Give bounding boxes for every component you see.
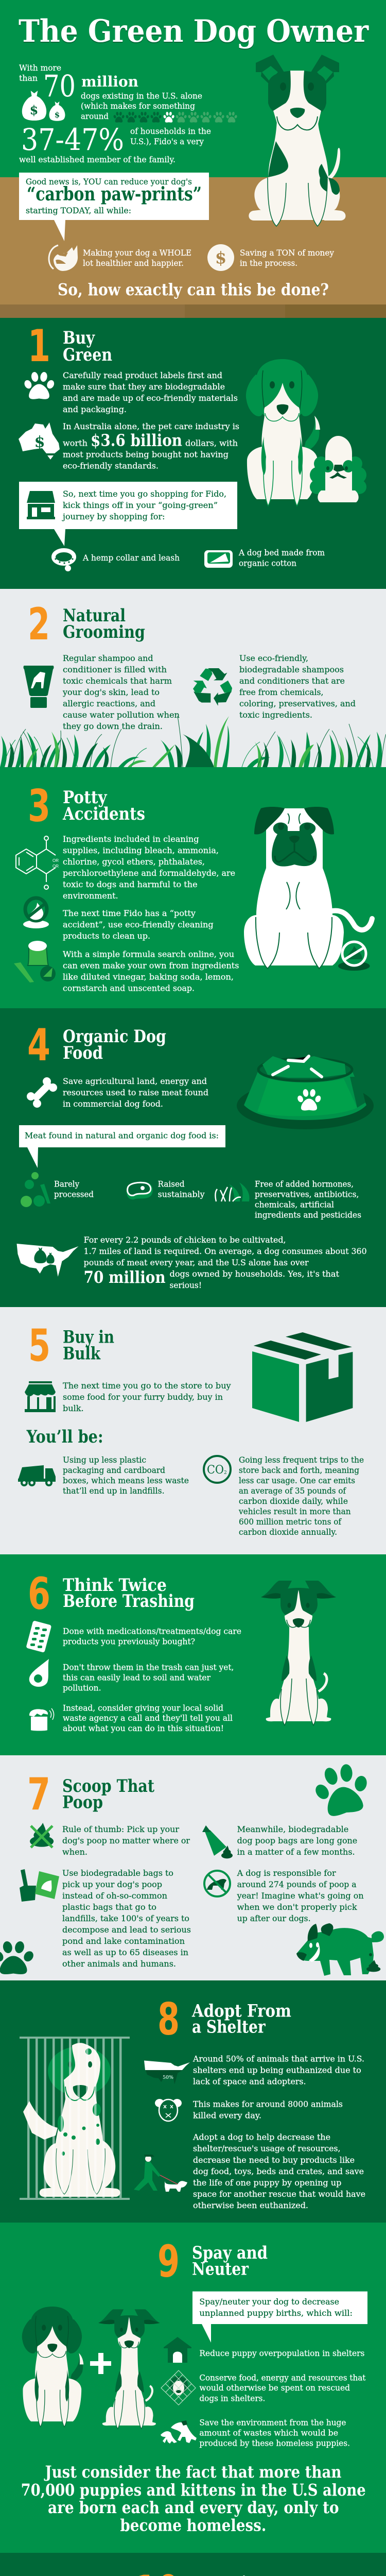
- text: free of added hormones: ingredients and pesticides: [255, 1210, 361, 1220]
- panel: 1 buy green: [0, 318, 386, 589]
- text: save the environment: Save the environment from the huge: [199, 2417, 346, 2428]
- callout: spay and neuter: unplanned puppy births, which will:: [199, 2308, 353, 2318]
- icon: collar: [54, 550, 74, 571]
- icon: row of paw prints: [113, 112, 238, 123]
- text: call waste agency: about what you can do in this situation!: [63, 1723, 224, 1733]
- text: use biodegradable bags: plastic bags that go to: [62, 1902, 156, 1912]
- text: fewer trips: carbon dioxide annually.: [239, 1527, 337, 1537]
- text: adopt a dog: space for another rescue that would have: [193, 2189, 365, 2199]
- text: labels: [63, 370, 238, 414]
- panel: 4 organic dog food: [0, 1008, 386, 1307]
- icon: CO2: CO: [207, 1464, 224, 1477]
- illustration: small spaniel: [310, 436, 366, 502]
- intro statistics text: (which makes for something: [81, 101, 195, 111]
- intro statistics text: around: [81, 111, 109, 121]
- text: don't throw: [63, 1663, 234, 1693]
- icon: two puppies: [161, 2420, 197, 2444]
- icon: dead dog face: [155, 2099, 182, 2121]
- text: chicken statistic: serious!: [170, 1280, 202, 1290]
- icon: homemade ingredients: [14, 941, 56, 982]
- heading: Food: [63, 1043, 103, 1063]
- text: formula: With a simple formula search online, you: [63, 949, 234, 959]
- text: don't throw: this can easily lead to soil and water: [63, 1673, 210, 1683]
- callout: spay and neuter: [192, 2292, 367, 2343]
- text: free of added hormones: chemicals, artificial: [255, 1199, 334, 1209]
- text: buy in bulk: The next time you go to the store to buy: [63, 1381, 231, 1391]
- text: regular shampoo: allergic reactions, and: [63, 699, 155, 708]
- text: free of added hormones: preservatives, antibiotics,: [255, 1189, 359, 1199]
- text: adopt a dog: the life of one puppy by opening up: [193, 2178, 341, 2188]
- text: fewer trips: carbon dioxide daily, while: [239, 1496, 348, 1506]
- heading: Poop: [62, 1792, 103, 1812]
- text: free of added hormones: [255, 1179, 361, 1220]
- text: agricultural land: in commercial dog food.: [63, 1099, 163, 1109]
- icon: dollar coin: $: [215, 248, 226, 267]
- panel: 8 adopt from a shelter: [0, 1980, 386, 2223]
- icon: chemical formula: OR: [52, 864, 59, 869]
- text: chicken statistic: For every 2.2 pounds of chicken to be cultivated,: [84, 1235, 286, 1245]
- heading: Before Trashing: [63, 1591, 195, 1612]
- icon: dollar coin: [207, 244, 234, 271]
- panel: 9 spay and neuter: [0, 2223, 386, 2553]
- text: conserve food: [199, 2373, 366, 2403]
- text: labels: make sure that they are biodegradable: [63, 382, 225, 392]
- heading: how can this be done: So, how exactly can this be done?: [58, 280, 329, 299]
- text: labels: and are made up of eco-friendly materials: [63, 393, 238, 403]
- text: formula: [63, 949, 239, 993]
- text: free of added hormones: Free of added hormones,: [255, 1179, 354, 1189]
- illustration: beagle: [246, 359, 320, 506]
- panel: 10 donations: [0, 2553, 386, 2576]
- heading: Buy: [63, 328, 95, 348]
- text: barely processed: [54, 1179, 94, 1199]
- icon: no poop: [338, 942, 370, 971]
- text: biodegradable bags gone: [237, 1824, 357, 1857]
- text: barely processed: Barely: [54, 1179, 79, 1189]
- heading: Neuter: [192, 2259, 249, 2280]
- text: use biodegradable bags: [62, 1868, 191, 1969]
- number 3: 3: [28, 781, 50, 832]
- heading: [62, 787, 145, 824]
- heading: [63, 605, 145, 642]
- intro statistics text: of households in the: [130, 126, 211, 136]
- benefit: healthier dog: [83, 248, 191, 268]
- text: ingredients: chlorine, gycol ethers, phthalates,: [63, 857, 205, 867]
- icon: USA map with money: [16, 1244, 78, 1277]
- heading: Adopt From: [191, 2001, 291, 2022]
- heading: [63, 1575, 195, 1612]
- text: labels: Carefully read product labels first and: [63, 370, 222, 380]
- text: 8000 animals: This makes for around 8000 animals: [193, 2099, 343, 2109]
- text: save the environment: produced by these homeless puppies.: [199, 2438, 350, 2448]
- number 6: 6: [28, 1568, 50, 1620]
- heading: [191, 2001, 291, 2038]
- benefit: saving money: in the process.: [240, 258, 297, 268]
- icon: grass: [215, 1182, 250, 1201]
- text: buy in bulk: bulk.: [63, 1403, 84, 1413]
- text: adopt a dog: shelter/rescue's usage of resources,: [193, 2144, 341, 2154]
- icon: chemical formula: OR: [52, 858, 59, 863]
- icon: steak: [127, 1182, 153, 1199]
- text: don't throw: pollution.: [63, 1683, 101, 1693]
- text: use biodegradable bags: landfills, take 100's of years to: [62, 1913, 189, 1923]
- text: agricultural land: Save agricultural land, energy and: [63, 1076, 207, 1086]
- text: regular shampoo: Regular shampoo and: [63, 653, 153, 663]
- icon: happy curled dog: [49, 245, 78, 271]
- text: 50% euthanized: shelters end up being euthanized due to: [193, 2065, 361, 2075]
- text: less plastic: that’ll end up in landfills.: [63, 1486, 165, 1496]
- text: less plastic: boxes, which means less waste: [63, 1476, 189, 1485]
- number 2: 2: [28, 599, 50, 650]
- text: australia statistic: eco-friendly standards.: [63, 461, 159, 471]
- number 8: 8: [157, 1994, 180, 2045]
- icon: dog behind fence: [161, 2370, 196, 2405]
- benefit: healthier dog: Making your dog a WHOLE: [83, 248, 191, 258]
- text: australia statistic: [63, 421, 239, 471]
- text: call waste agency: [63, 1703, 233, 1733]
- icon: money bags: [22, 91, 65, 121]
- text: agricultural land: resources used to raise meat found: [63, 1088, 208, 1097]
- text: hemp collar: A hemp collar and leash: [82, 553, 180, 563]
- text: less plastic: [63, 1455, 189, 1496]
- text: adopt a dog: Adopt a dog to help decrease the: [192, 2132, 330, 2142]
- icon: dark paw: [0, 1941, 35, 1974]
- text: next time: [63, 908, 214, 941]
- text: 50% euthanized: Around 50% of animals that arrive in U.S.: [192, 2054, 364, 2064]
- text: chicken statistic: 1.7 miles of land is required. On average, a dog consumes about 360: [84, 1246, 367, 1256]
- text: conserve food: Conserve food, energy and resources that: [199, 2373, 366, 2382]
- icon: telephone: [29, 1708, 54, 1731]
- illustration: greyhound: [261, 1581, 336, 1725]
- text: buy in bulk: some food for your furry buddy, buy in: [63, 1392, 223, 1402]
- text: eco shampoo: free from chemicals,: [239, 687, 323, 697]
- icon: dog house: [164, 2337, 191, 2363]
- text: chicken statistic: pounds of meat every year, and the U.S alone has over: [84, 1258, 309, 1267]
- illustration: grass: [0, 716, 386, 767]
- big fact: become homeless.: [120, 2516, 266, 2535]
- text: formula: like diluted vinegar, baking soda, lemon,: [63, 972, 234, 982]
- text: less plastic: Using up less plastic: [63, 1455, 146, 1465]
- heading: you'll be: You’ll be:: [26, 1427, 103, 1447]
- number 9: 9: [157, 2236, 180, 2287]
- number 4: 4: [27, 1020, 50, 1071]
- text: regular shampoo: [62, 653, 180, 731]
- text: use biodegradable bags: instead of oh-so-common: [62, 1891, 167, 1901]
- heading: Organic Dog: [63, 1026, 166, 1047]
- text: fewer trips: Going less frequent trips to the: [239, 1455, 364, 1465]
- callout: carbon paw-prints: “carbon paw-prints”: [27, 183, 202, 205]
- benefit: healthier dog: lot healthier and happier.: [83, 258, 184, 268]
- text: chicken statistic: [84, 1235, 367, 1290]
- panel: intro: [0, 0, 386, 318]
- heading: Grooming: [63, 622, 145, 642]
- illustration: cage bars: [20, 2037, 130, 2200]
- text: 274 pounds: up after our dogs.: [237, 1913, 311, 1923]
- text: next time: accident”, use eco-friendly cleaning: [63, 920, 214, 929]
- text: conserve food: would otherwise be spent on rescued: [199, 2383, 350, 2393]
- text: formula: cornstarch and unscented soap.: [63, 983, 195, 993]
- text: australia statistic: $3.6 billion: [91, 431, 182, 450]
- text: save the environment: amount of wastes which would be: [199, 2428, 338, 2437]
- illustration: greyhound: [98, 2309, 160, 2429]
- panel: 3 potty accidents: [0, 767, 386, 1008]
- text: rule of thumb: Rule of thumb: Pick up your: [62, 1824, 179, 1834]
- icon: dog bed: [204, 550, 233, 568]
- heading: Scoop That: [62, 1776, 154, 1797]
- icon: recycle: [193, 668, 232, 706]
- text: raised sustainably: sustainably: [158, 1189, 205, 1199]
- intro statistics text: dogs existing in the U.S. alone: [81, 91, 202, 101]
- text: regular shampoo: your dog's skin, lead to: [62, 687, 160, 697]
- text: rule of thumb: when.: [62, 1847, 87, 1857]
- text: formula: can even make your own from ingredients: [63, 960, 239, 971]
- heading: [63, 1327, 114, 1364]
- text: reduce overpopulation: Reduce puppy overpopulation in shelters: [199, 2348, 364, 2358]
- text: dog bed: A dog bed made from: [238, 548, 325, 557]
- illustration: setter dog in cage: [23, 2043, 120, 2197]
- text: fewer trips: less car usage. One car emits: [239, 1476, 355, 1485]
- text: fewer trips: vehicles result in more than: [238, 1506, 351, 1516]
- icon: poop bag: [202, 1825, 233, 1858]
- text: chicken statistic: dogs owned by households. Yes, it's that: [170, 1269, 340, 1279]
- text: biodegradable bags gone: in a matter of a few months.: [237, 1847, 355, 1857]
- icon: big paw: [309, 1759, 375, 1819]
- text: 8000 animals: [193, 2099, 343, 2120]
- text: ingredients: toxic to dogs and harmful to the: [63, 879, 198, 889]
- text: eco shampoo: Use eco-friendly,: [239, 653, 308, 663]
- text: call waste agency: waste agency a call and they'll tell you all: [63, 1713, 233, 1723]
- text: biodegradable bags gone: Meanwhile, biodegradable: [237, 1824, 348, 1834]
- number 5: 5: [28, 1320, 50, 1371]
- icon: garbage truck: [18, 1465, 56, 1486]
- icon: no dog fouling: [204, 1871, 230, 1896]
- icon: money bags: $: [55, 110, 60, 120]
- illustration: dog food bowl: [237, 1056, 374, 1129]
- icon: person walking small dog: [134, 2155, 187, 2192]
- text: adopt a dog: [192, 2132, 365, 2210]
- text: next time: products to clean up.: [63, 931, 150, 941]
- text: done with medications: [63, 1626, 241, 1647]
- callout: meat: [19, 1125, 225, 1168]
- panel: 2 natural grooming: [0, 589, 386, 767]
- text: regular shampoo: cause water pollution when: [63, 710, 180, 720]
- text: 50% euthanized: lack of space and adopters.: [193, 2076, 306, 2087]
- text: australia statistic: In Australia alone, the pet care industry is: [63, 421, 239, 431]
- text: ingredients: [63, 834, 235, 901]
- text: fewer trips: an average of 35 pounds of: [239, 1486, 346, 1496]
- text: agricultural land: [63, 1076, 208, 1109]
- icon: scoop and bag: [20, 1869, 59, 1902]
- intro statistics text: than: [19, 73, 38, 83]
- callout: shopping: journey by shopping for:: [62, 512, 165, 521]
- text: eco shampoo: [239, 653, 356, 720]
- text: regular shampoo: they go down the drain.: [63, 721, 163, 731]
- heading: [63, 328, 112, 365]
- icon: money bags: $: [30, 103, 38, 117]
- text: save the environment: [199, 2417, 350, 2448]
- icon: paw: [23, 371, 55, 399]
- callout: shopping: So, next time you go shopping for Fido,: [63, 489, 226, 499]
- intro statistics text: U.S.), Fido's a very: [130, 137, 204, 146]
- text: 274 pounds: [237, 1868, 364, 1923]
- text: adopt a dog: otherwise been euthanized.: [193, 2200, 308, 2210]
- icon: pet store: [25, 1381, 56, 1412]
- text: ingredients: Ingredients included in cleaning: [63, 834, 199, 844]
- text: australia statistic: worth: [63, 438, 87, 448]
- benefit: saving money: Saving a TON of money: [240, 248, 334, 258]
- text: 274 pounds: year! Imagine what's going on: [237, 1891, 364, 1901]
- intro statistics text: well established member of the family.: [19, 155, 176, 164]
- text: rule of thumb: dog's poop no matter where or: [62, 1836, 190, 1845]
- text: call waste agency: Instead, consider giving your local solid: [63, 1703, 223, 1713]
- text: 50% euthanized: [192, 2054, 364, 2087]
- callout: carbon paw-prints: starting TODAY, all while:: [26, 206, 131, 215]
- text: fewer trips: store back and forth, meaning: [239, 1465, 359, 1475]
- text: eco shampoo: toxic ingredients.: [239, 710, 312, 720]
- icon: USA 50 percent: 50%: [163, 2075, 173, 2080]
- icon: CO2: 2: [224, 1470, 227, 1476]
- icon: no cleaning chemicals: [23, 898, 49, 928]
- text: 274 pounds: around 274 pounds of poop a: [237, 1879, 357, 1889]
- benefit: saving money: [240, 248, 334, 268]
- icon: chemical formula: [16, 836, 59, 889]
- text: australia statistic: dollars, with: [185, 438, 238, 448]
- heading: Think Twice: [63, 1575, 167, 1596]
- text: dog bed: organic cotton: [239, 558, 296, 568]
- intro statistics text: [19, 63, 211, 164]
- big fact: Just consider the fact that more than: [44, 2462, 341, 2482]
- icon: shampoo tube: [24, 666, 54, 708]
- illustration: pug: [244, 807, 372, 969]
- text: australia statistic: most products being bought not having: [63, 449, 229, 460]
- callout: shopping: [19, 482, 237, 546]
- number 1: 1: [28, 320, 50, 372]
- callout: spay and neuter: Spay/neuter your dog to decrease: [199, 2297, 339, 2307]
- callout: carbon paw-prints: [19, 173, 209, 241]
- icon: plus: [90, 2353, 111, 2374]
- text: use biodegradable bags: pond and lake contamination: [62, 1936, 185, 1946]
- heading: a Shelter: [192, 2017, 266, 2038]
- text: ingredients: perchloroethylene and formaldehyde, are: [63, 868, 235, 878]
- heading: Accidents: [62, 804, 145, 824]
- text: labels: and packaging.: [63, 404, 127, 414]
- text: fewer trips: 600 million metric tons of: [239, 1517, 342, 1527]
- text: 274 pounds: when we don't properly pick: [237, 1902, 357, 1912]
- text: raised sustainably: Raised: [158, 1179, 185, 1189]
- illustration: pooping dog: [296, 1923, 384, 1976]
- text: adopt a dog: decrease the need to buy products like: [193, 2155, 355, 2165]
- heading: [192, 2243, 268, 2280]
- text: regular shampoo: toxic chemicals that harm: [63, 676, 172, 686]
- text: rule of thumb: [62, 1824, 190, 1857]
- panel: 6 think twice: [0, 1554, 386, 1755]
- text: use biodegradable bags: pick up your dog's poop: [62, 1879, 162, 1889]
- text: chicken statistic: 70 million: [84, 1267, 166, 1287]
- callout: carbon paw-prints: Good news is, YOU can reduce your dog's: [26, 177, 192, 187]
- icon: USA 50 percent: [144, 2061, 190, 2084]
- heading: Bulk: [63, 1344, 101, 1364]
- intro statistics text: 70: [43, 69, 76, 104]
- icon: bone: [27, 1077, 57, 1108]
- text: eco shampoo: coloring, preservatives, and: [239, 699, 356, 708]
- big fact: [21, 2462, 366, 2535]
- text: done with medications: products you previously bought?: [63, 1636, 195, 1647]
- callout: shopping: kick things off in your “going-green”: [63, 500, 218, 510]
- text: done with medications: Done with medications/treatments/dog care: [63, 1626, 241, 1636]
- number 7: 7: [27, 1769, 50, 1820]
- callout: meat: Meat found in natural and organic dog food is:: [25, 1130, 219, 1141]
- heading: Spay and: [192, 2243, 268, 2263]
- heading: [63, 1026, 166, 1063]
- text: regular shampoo: conditioner is filled with: [63, 665, 167, 674]
- text: don't throw: Don't throw them in the trash can just yet,: [63, 1663, 234, 1672]
- icon: vegetables: [21, 1172, 50, 1207]
- intro statistics text: million: [81, 73, 138, 90]
- text: ingredients: supplies, including bleach, ammonia,: [63, 845, 219, 855]
- text: 274 pounds: A dog is responsible for: [237, 1868, 336, 1878]
- icon: australia: [19, 422, 60, 460]
- heading: [62, 1776, 154, 1812]
- icon: store: [27, 491, 55, 519]
- heading: Natural: [63, 605, 126, 626]
- text: 8000 animals: killed every day.: [193, 2110, 261, 2120]
- heading: Green: [63, 345, 112, 365]
- text: less plastic: packaging and cardboard: [63, 1465, 165, 1475]
- intro statistics text: With more: [19, 63, 61, 73]
- text: ingredients: environment.: [63, 891, 118, 901]
- text: barely processed: processed: [54, 1189, 94, 1199]
- text: eco shampoo: and conditioners that are: [239, 676, 345, 686]
- heading: Potty: [63, 787, 108, 808]
- text: eco shampoo: biodegradable shampoos: [239, 665, 344, 674]
- icon: toxic drop skull: [29, 1659, 49, 1687]
- text: fewer trips: [238, 1455, 364, 1537]
- icon: crossed poop: [30, 1823, 54, 1848]
- panel: 5 buy in bulk: [0, 1307, 386, 1554]
- text: raised sustainably: [158, 1179, 205, 1199]
- text: use biodegradable bags: decompose and lead to serious: [62, 1925, 191, 1935]
- illustration: sitting dog: [249, 55, 346, 226]
- text: use biodegradable bags: Use biodegradable bags to: [62, 1868, 173, 1878]
- heading: Buy in: [63, 1327, 114, 1348]
- text: conserve food: dogs in shelters.: [199, 2394, 265, 2403]
- text: dog bed: [238, 548, 325, 568]
- text: next time: The next time Fido has a “potty: [63, 908, 196, 918]
- icon: australia: $: [34, 433, 45, 451]
- text: buy in bulk: [63, 1381, 231, 1413]
- intro statistics text: 37-47%: [21, 122, 124, 157]
- text: adopt a dog: dog food, toys, beds and crates, and save: [193, 2166, 364, 2176]
- illustration: beagle: [22, 2307, 83, 2427]
- icon: pill packet: [26, 1620, 51, 1653]
- illustration: cardboard box: [252, 1332, 353, 1422]
- text: use biodegradable bags: other animals and humans.: [62, 1959, 176, 1969]
- text: use biodegradable bags: as well as up to 65 diseases in: [62, 1947, 188, 1957]
- icon: CO2: [204, 1456, 231, 1483]
- text: biodegradable bags gone: dog poop bags are long gone: [237, 1836, 357, 1845]
- panel: 7 scoop that poop: [0, 1755, 386, 1980]
- big fact: are born each and every day, only to: [48, 2498, 339, 2517]
